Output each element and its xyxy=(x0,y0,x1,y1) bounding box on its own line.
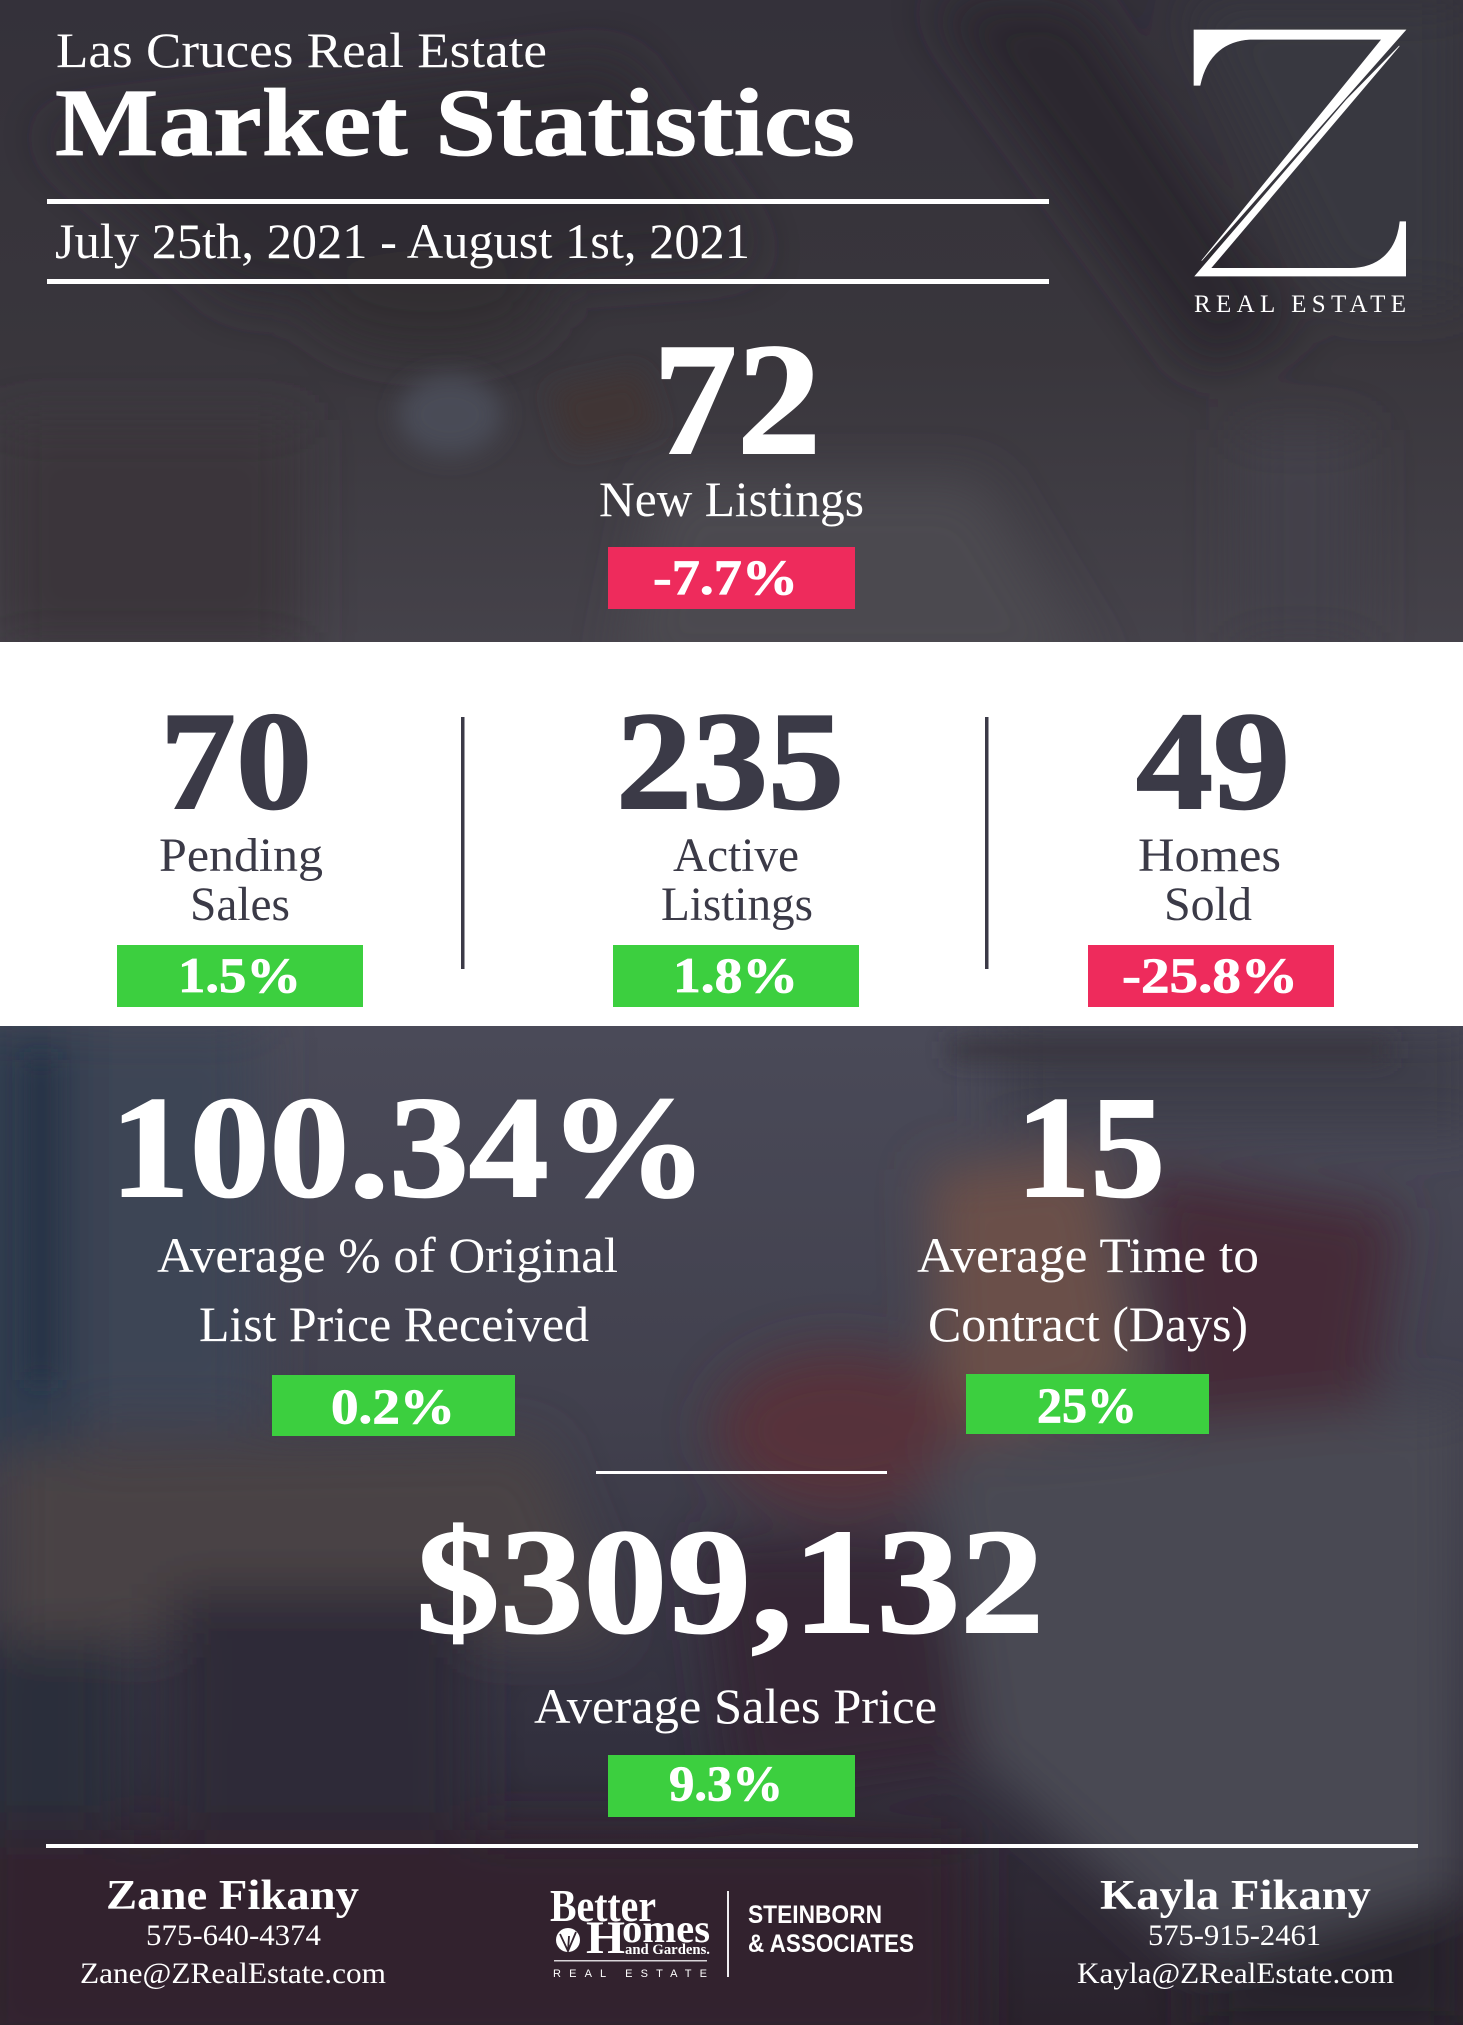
stat: homes sold: Homes xyxy=(1138,829,1281,882)
header title block xyxy=(55,22,855,176)
icon: leaf circle xyxy=(556,1928,580,1952)
stat: active listings: 235 xyxy=(616,684,844,839)
stat: active listings: Active xyxy=(673,829,799,882)
stat: average percent of list price xyxy=(110,1068,708,1436)
stat: average percent of list price: Average % of Original xyxy=(157,1227,618,1283)
contact: Kayla Fikany: 575-915-2461 xyxy=(1148,1919,1321,1952)
contact: Kayla Fikany: Kayla Fikany xyxy=(1100,1873,1371,1919)
change badge xyxy=(608,1755,855,1817)
logo: Better Homes and Gardens, Steinborn and Associates: REAL ESTATE xyxy=(553,1968,707,1980)
subtitle: Las Cruces Real Estate xyxy=(56,22,547,78)
stat: pending sales: 70 xyxy=(160,684,312,839)
stat: average time to contract: 15 xyxy=(1016,1068,1165,1228)
logo: Better Homes and Gardens, Steinborn and Associates: H xyxy=(586,1912,625,1964)
change badge xyxy=(613,945,859,1007)
contact: Kayla Fikany: Kayla@ZRealEstate.com xyxy=(1077,1957,1394,1990)
change badge: 1.8% xyxy=(673,947,798,1003)
stat: new listings: New Listings xyxy=(599,471,864,527)
stat: active listings xyxy=(613,684,859,1007)
stat: average sales price: $309,132 xyxy=(416,1499,1044,1665)
stat: pending sales: Pending xyxy=(159,829,323,882)
background photo: bottom section xyxy=(0,1020,1463,2025)
stat: average percent of list price: 100.34% xyxy=(110,1068,708,1228)
stat: new listings xyxy=(599,310,864,609)
stat: pending sales xyxy=(117,684,363,1007)
stat: homes sold xyxy=(1088,684,1334,1007)
logo: Better Homes and Gardens, Steinborn and Associates: & ASSOCIATES xyxy=(748,1930,914,1958)
stat: average time to contract: Average Time to xyxy=(917,1227,1259,1283)
main title: Market Statistics xyxy=(55,69,855,176)
stat: pending sales: Sales xyxy=(190,878,290,931)
change badge: 25% xyxy=(1037,1377,1137,1433)
change badge: 1.5% xyxy=(178,947,301,1003)
divider xyxy=(461,717,464,969)
change badge: -7.7% xyxy=(653,549,798,605)
logo: Better Homes and Gardens, Steinborn and Associates: STEINBORN xyxy=(748,1901,882,1929)
change badge xyxy=(966,1374,1209,1434)
date range with rules: July 25th, 2021 - August 1st, 2021 xyxy=(55,213,750,269)
stat: new listings: 72 xyxy=(653,310,821,488)
stat: average time to contract: Contract (Days) xyxy=(928,1296,1248,1352)
contact: Zane Fikany: Zane Fikany xyxy=(106,1873,359,1919)
contact: Zane Fikany: Zane@ZRealEstate.com xyxy=(80,1957,386,1990)
contact: Zane Fikany: 575-640-4374 xyxy=(146,1919,321,1952)
change badge xyxy=(1088,945,1334,1007)
change badge: 9.3% xyxy=(669,1755,783,1811)
background photo: top section xyxy=(0,0,1463,680)
change badge xyxy=(117,945,363,1007)
date range with rules xyxy=(47,199,1049,284)
logo: Z Real Estate xyxy=(1194,30,1406,318)
stat: homes sold: Sold xyxy=(1164,878,1252,931)
stat: active listings: Listings xyxy=(661,878,813,931)
change badge: -25.8% xyxy=(1122,947,1298,1003)
contact: Kayla Fikany xyxy=(1077,1873,1394,1990)
divider xyxy=(985,717,988,969)
change badge xyxy=(608,547,855,609)
stat: homes sold: 49 xyxy=(1136,684,1290,839)
change badge xyxy=(272,1375,515,1436)
stat: average time to contract xyxy=(917,1068,1259,1434)
logo: Better Homes and Gardens, Steinborn and Associates: omes xyxy=(622,1906,710,1951)
stat: average sales price xyxy=(416,1499,1044,1817)
contact: Zane Fikany xyxy=(80,1873,386,1990)
stat: average percent of list price: List Price Received xyxy=(199,1296,589,1352)
logo: Better Homes and Gardens, Steinborn and Associates: Better xyxy=(550,1880,656,1931)
white stats band xyxy=(0,642,1463,1026)
logo: Better Homes and Gardens, Steinborn and Associates xyxy=(550,1880,914,1980)
logo: Better Homes and Gardens, Steinborn and Associates: and Gardens. xyxy=(625,1942,710,1958)
logo: Z Real Estate: REAL ESTATE xyxy=(1194,291,1406,318)
change badge: 0.2% xyxy=(331,1378,455,1434)
stat: average sales price: Average Sales Price xyxy=(534,1678,937,1734)
